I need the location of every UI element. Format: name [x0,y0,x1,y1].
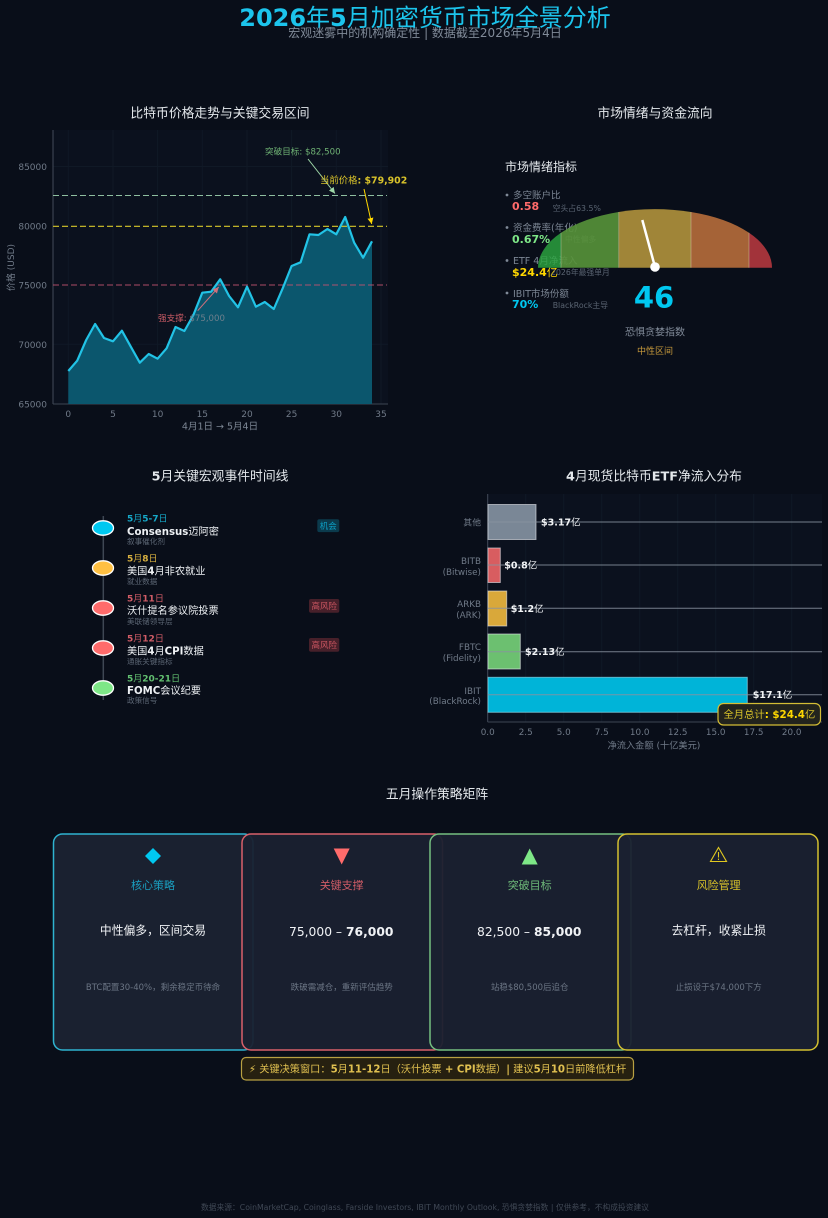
value labels: $2.13亿 [525,646,565,658]
title: 宏观迷雾中的机构确定性 | 数据截至2026年5月4日 [288,25,562,40]
x axis labels: 20 [241,410,253,420]
event: nonfarm: 美国4月非农就业 [127,564,205,578]
category labels: BITB [461,557,481,567]
annotation: current price [320,174,407,224]
heading: price chart: 比特币价格走势与关键交易区间 [130,106,310,122]
y axis labels: 70000 [18,341,47,351]
heading: timeline: 5月关键宏观事件时间线 [152,470,289,484]
value labels: $17.1亿 [753,689,792,701]
price line [68,217,372,371]
y axis labels: 75000 [18,282,47,292]
event: CPI: 高风险 [311,640,337,651]
event: CPI: 5月12日 [127,634,164,644]
heading: strategy matrix: 五月操作策略矩阵 [386,786,488,802]
panel: core strategy: 核心策略 [131,878,175,892]
panel: key support: 关键支撑 [320,878,364,892]
panel: breakout target: 82,500 – 85,000 [477,925,581,939]
category labels: IBIT [464,687,482,697]
title: 2026年5月加密货币市场全景分析 [239,4,611,32]
annotation: support: 强支撑: $75,000 [158,312,225,324]
y axis labels [18,163,47,410]
x axis labels: 2.5 [519,728,533,738]
panel: sentiment indicators: 0.67% [512,233,550,246]
bar chart: ETF net inflow [429,494,822,752]
panel: breakout target: 站稳$80,500后追仓 [491,982,569,993]
x axis labels: 15 [197,410,208,420]
x axis labels: 0.0 [481,728,495,738]
panel: key support: 跌破需减仓，重新评估趋势 [291,982,393,993]
value labels: $3.17亿 [541,516,581,528]
heading: ETF chart: 4月现货比特币ETF净流入分布 [566,468,742,484]
panel: core strategy: 中性偏多，区间交易 [100,924,206,938]
panel: sentiment indicators: 0.58 [512,200,539,213]
panel: risk management: 风险管理 [697,878,741,892]
needle [642,220,655,267]
heading: sentiment: 市场情绪与资金流向 [597,106,713,122]
panel: sentiment indicators: $24.4亿 [512,266,558,279]
panel: core strategy: BTC配置30-40%，剩余稳定币待命 [86,982,221,993]
category labels: (BlackRock) [429,697,481,707]
reference lines [53,194,387,196]
icon: up triangle [522,848,538,864]
x axis labels: 12.5 [668,728,687,738]
event: Warsh vote: 5月11日 [127,594,164,604]
line chart: bitcoin price [5,130,407,432]
value labels: $0.8亿 [504,560,537,572]
axis title: 净流入金额 (十亿美元) [608,740,700,752]
x axis labels: 7.5 [595,728,609,738]
x axis labels: 0 [65,410,71,420]
panel: sentiment indicators: IBIT市场份额 [513,288,569,300]
bars [488,504,747,712]
panel: key support: 75,000 – 76,000 [289,925,393,939]
event: nonfarm: 5月8日 [127,554,158,564]
gauge: fear and greed [538,209,772,357]
y axis labels: 85000 [18,163,47,173]
panel: risk management: 止损设于$74,000下方 [676,982,762,993]
axis titles: 4月1日 → 5月4日 [182,422,258,432]
value labels: $1.2亿 [511,603,544,615]
event: Consensus: Consensus迈阿密 [127,525,219,538]
category labels: (Bitwise) [443,568,481,578]
value labels [504,516,792,701]
panel: key support [242,834,442,1050]
annotation: breakout [265,146,341,194]
event: Warsh vote: 美联储领导层 [127,616,173,626]
event: nonfarm: 就业数据 [127,576,158,586]
category labels: FBTC [459,643,481,653]
event: FOMC: FOMC会议纪要 [127,684,201,697]
panel: sentiment indicators: 2026年最强单月 [551,267,610,277]
callout: total: 全月总计: $24.4亿 [724,708,815,721]
event: Consensus [92,514,339,546]
panel: sentiment indicators: 资金费率(年化) [513,222,577,234]
event: FOMC: 政策信号 [127,695,158,705]
panel: breakout target [430,834,631,1050]
event: nonfarm [92,554,205,586]
event: Warsh vote: 高风险 [311,601,337,612]
timeline [92,514,339,705]
panel: risk management [618,834,818,1050]
panel: sentiment indicators: 中性偏多 [565,234,596,244]
event: FOMC: 5月20-21日 [127,674,180,684]
callout: decision window: ⚡ 关键决策窗口：5月11-12日（沃什投票 + CPI数据）| 建议5月10日前降低杠杆 [249,1062,626,1076]
x axis labels: 10 [152,410,164,420]
x axis labels: 5 [110,410,116,420]
panel: sentiment indicators: 多空账户比 [513,190,561,202]
y axis labels: 80000 [18,223,47,233]
event: CPI: 美国4月CPI数据 [127,644,204,658]
event: Warsh vote [92,594,339,626]
panel: breakout target: 突破目标 [508,878,552,892]
x axis labels: 10.0 [630,728,650,738]
category labels: ARKB [457,600,481,610]
event: Consensus: 5月5-7日 [127,514,168,524]
x axis labels: 25 [286,410,297,420]
panel: risk management: 去杠杆，收紧止损 [672,924,766,938]
panel: sentiment indicators [505,159,610,311]
panel: sentiment indicators: 空头占63.5% [553,203,601,213]
panel: sentiment indicators: 市场情绪指标 [505,159,577,174]
category labels [429,516,482,707]
x axis labels: 5.0 [557,728,571,738]
category labels: (Fidelity) [443,654,481,664]
callout: decision window [242,1058,634,1080]
x axis labels: 15.0 [706,728,726,738]
area fill [68,217,372,404]
icon: down triangle [334,848,350,864]
x axis labels [65,410,387,420]
line chart: bitcoin price: 价格 (USD) [5,244,17,291]
y axis labels: 65000 [18,400,47,410]
annotation: current price: 当前价格: $79,902 [320,174,407,186]
x axis labels: 17.5 [744,728,763,738]
row lines [488,522,822,695]
x axis labels: 20.0 [782,728,802,738]
x axis labels [481,728,802,738]
panel: core strategy [54,834,253,1050]
panel: sentiment indicators: 70% [512,298,538,311]
annotation: support [158,287,225,324]
gauge value: 46 [634,280,674,314]
x axis labels: 30 [331,410,342,420]
gauge: fear and greed: 中性区间 [637,345,673,357]
callout: total [718,704,820,725]
icon: warning [710,848,726,862]
category labels: (ARK) [456,611,481,621]
icon: diamond [145,848,161,864]
panel: sentiment indicators: BlackRock主导 [553,300,608,310]
event: Consensus: 机会 [320,521,337,532]
panel: sentiment indicators: ETF 4月净流入 [513,255,578,267]
category labels: 其他 [463,516,481,528]
event: FOMC [92,674,201,705]
event: Consensus: 叙事催化剂 [127,536,165,546]
annotation: breakout: 突破目标: $82,500 [265,146,341,158]
event: CPI: 通胀关键指标 [127,656,173,666]
footer: 数据来源：CoinMarketCap, Coinglass, Farside Investors, IBIT Monthly Outlook, 恐惧贪婪指数 | 仅供参考，不构成投资建议 [201,1202,649,1212]
gauge: fear and greed: 恐惧贪婪指数 [625,326,685,338]
event: CPI [92,634,339,666]
event: Warsh vote: 沃什提名参议院投票 [127,604,219,617]
x axis labels: 35 [375,410,387,420]
